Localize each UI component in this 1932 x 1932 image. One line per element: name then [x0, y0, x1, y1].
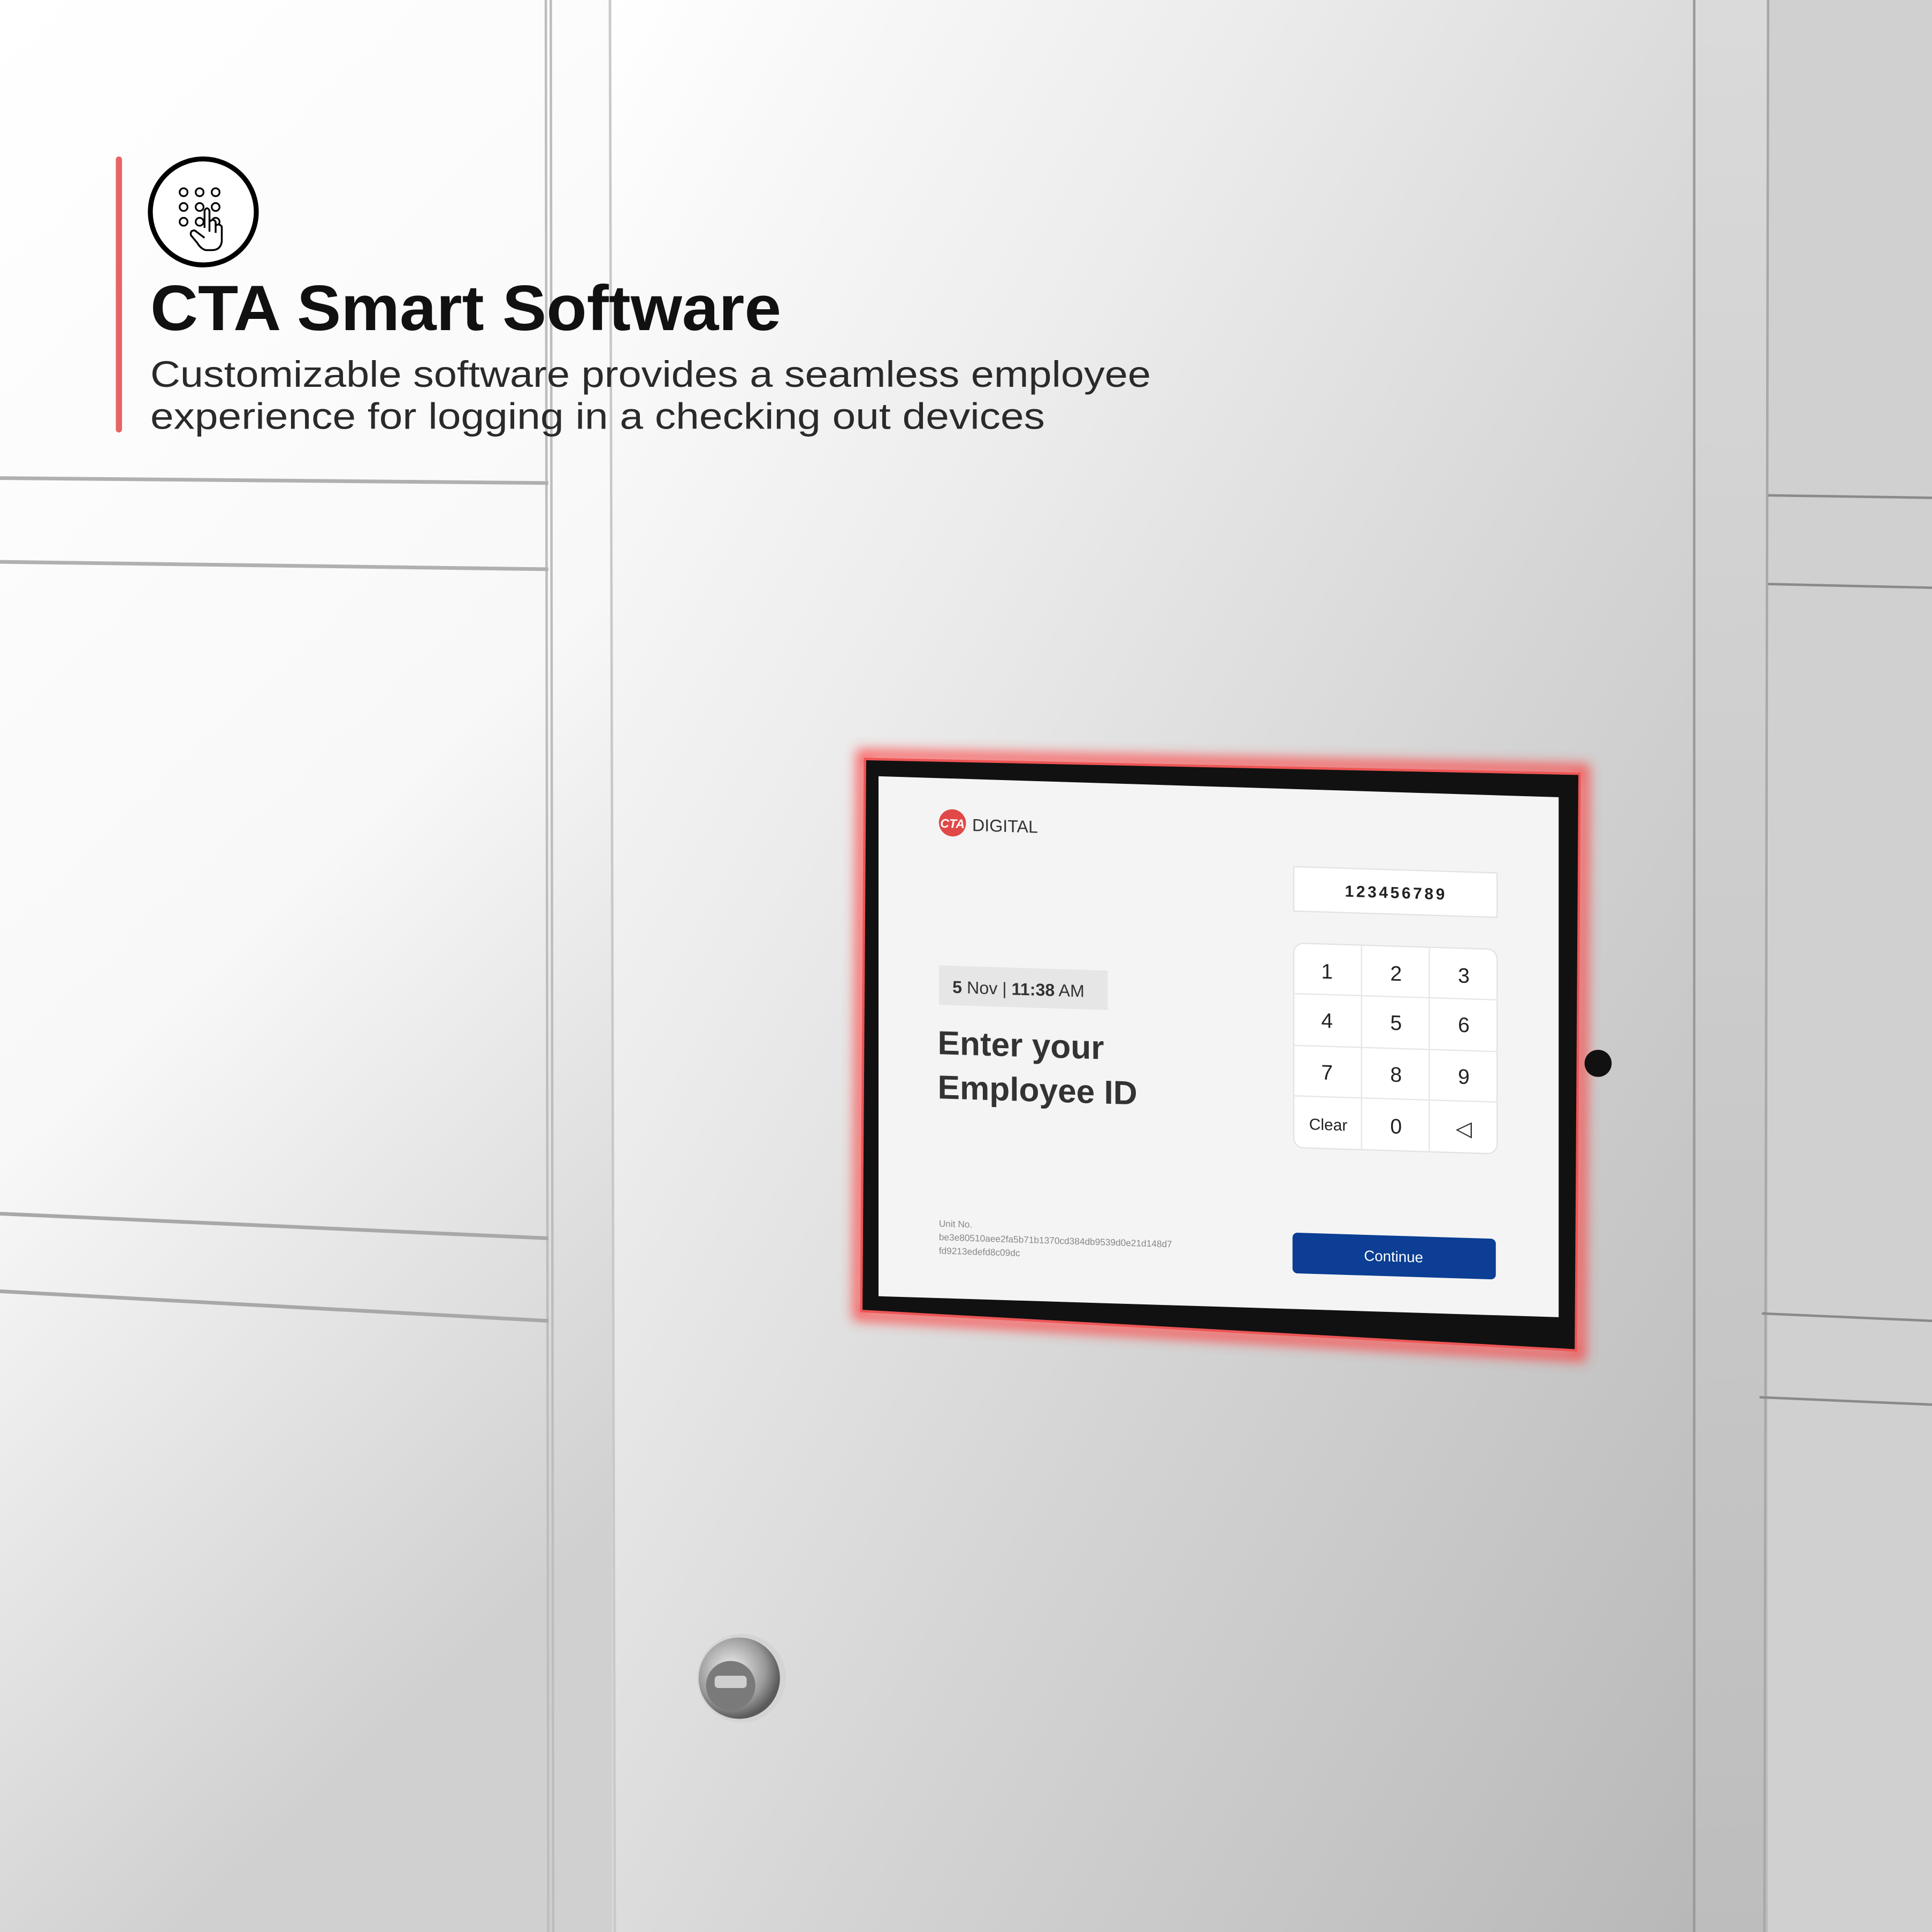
continue button: Continue: [1364, 1247, 1423, 1266]
keypad: Clear: [1309, 1116, 1347, 1134]
icon: keypad touch: [150, 159, 256, 265]
background: right side strip: [1694, 0, 1932, 1932]
keypad: 4: [1321, 1010, 1333, 1033]
prompt: [938, 1025, 1137, 1112]
title: CTA Smart Software: [150, 273, 781, 344]
locker panel seams: [0, 0, 615, 1932]
logo: DIGITAL: [972, 815, 1038, 837]
unit number: Unit No.: [939, 1218, 972, 1230]
unit number: be3e80510aee2fa5b71b1370cd384db9539d0e21d148d7: [939, 1232, 1172, 1249]
id input field: 123456789: [1345, 883, 1447, 904]
id input field: [1294, 867, 1497, 917]
screen glow: [859, 755, 1583, 1355]
keypad: 3: [1458, 965, 1470, 988]
keypad: 9: [1458, 1065, 1470, 1089]
date/time chip: [939, 965, 1108, 1010]
subtitle: experience for logging in a checking out devices: [150, 395, 1045, 437]
continue button: [1293, 1233, 1496, 1279]
logo: [939, 809, 1038, 839]
logo: CTA: [940, 816, 965, 831]
screen bezel: [861, 759, 1579, 1350]
door handle dot: [1585, 1050, 1612, 1077]
keypad: 5: [1390, 1012, 1402, 1035]
keypad: [1294, 943, 1497, 1154]
keypad: 2: [1390, 963, 1402, 986]
keypad: 1: [1321, 960, 1333, 983]
key lock: [697, 1634, 786, 1723]
subtitle: [150, 353, 1151, 437]
keypad: 6: [1458, 1014, 1470, 1037]
date/time chip: 5 Nov | 11:38 AM: [952, 978, 1085, 1001]
background: left locker panels: [0, 0, 613, 1932]
screen display: [879, 776, 1559, 1317]
keypad: 0: [1390, 1115, 1402, 1139]
background: main door: [613, 0, 1694, 1932]
accent bar: [116, 156, 122, 432]
prompt: Employee ID: [938, 1069, 1137, 1112]
unit number: fd9213edefd8c09dc: [939, 1245, 1020, 1258]
keypad: ◁: [1456, 1117, 1472, 1141]
subtitle: Customizable software provides a seamless employee: [150, 353, 1151, 395]
unit number: [939, 1218, 1172, 1263]
prompt: Enter your: [938, 1025, 1104, 1067]
keypad: 8: [1390, 1064, 1402, 1087]
keypad: 7: [1321, 1062, 1333, 1085]
